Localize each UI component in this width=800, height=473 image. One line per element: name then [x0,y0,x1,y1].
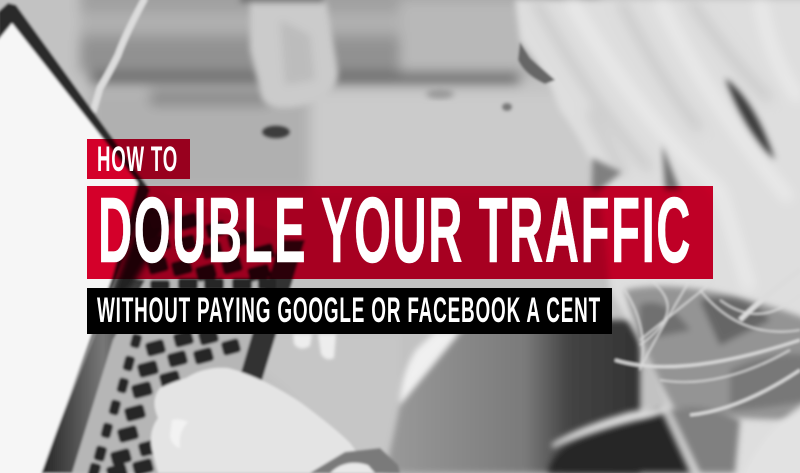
surface right of laptop [262,335,400,473]
label: how to: HOW TO [97,140,178,179]
upper hair strands [570,0,800,290]
earring [518,42,555,84]
screen [0,3,150,473]
bottle on desk [240,0,338,108]
hand [151,368,372,473]
mug at bottom right [548,406,690,473]
hair [515,0,800,473]
wristwatch [310,448,400,473]
bezel edge [40,278,145,473]
ring [170,419,188,448]
laptop [0,3,305,473]
fingers in background [293,334,336,359]
hair shadow streaks [625,286,800,420]
subtitle: without paying [87,288,612,334]
cable [93,0,145,112]
sleeve [400,332,470,406]
label: how to [87,139,190,179]
icon: keyboard keys [87,210,276,473]
hair strands [615,270,800,415]
wooden desk front [385,320,640,473]
laptop base [40,185,305,473]
